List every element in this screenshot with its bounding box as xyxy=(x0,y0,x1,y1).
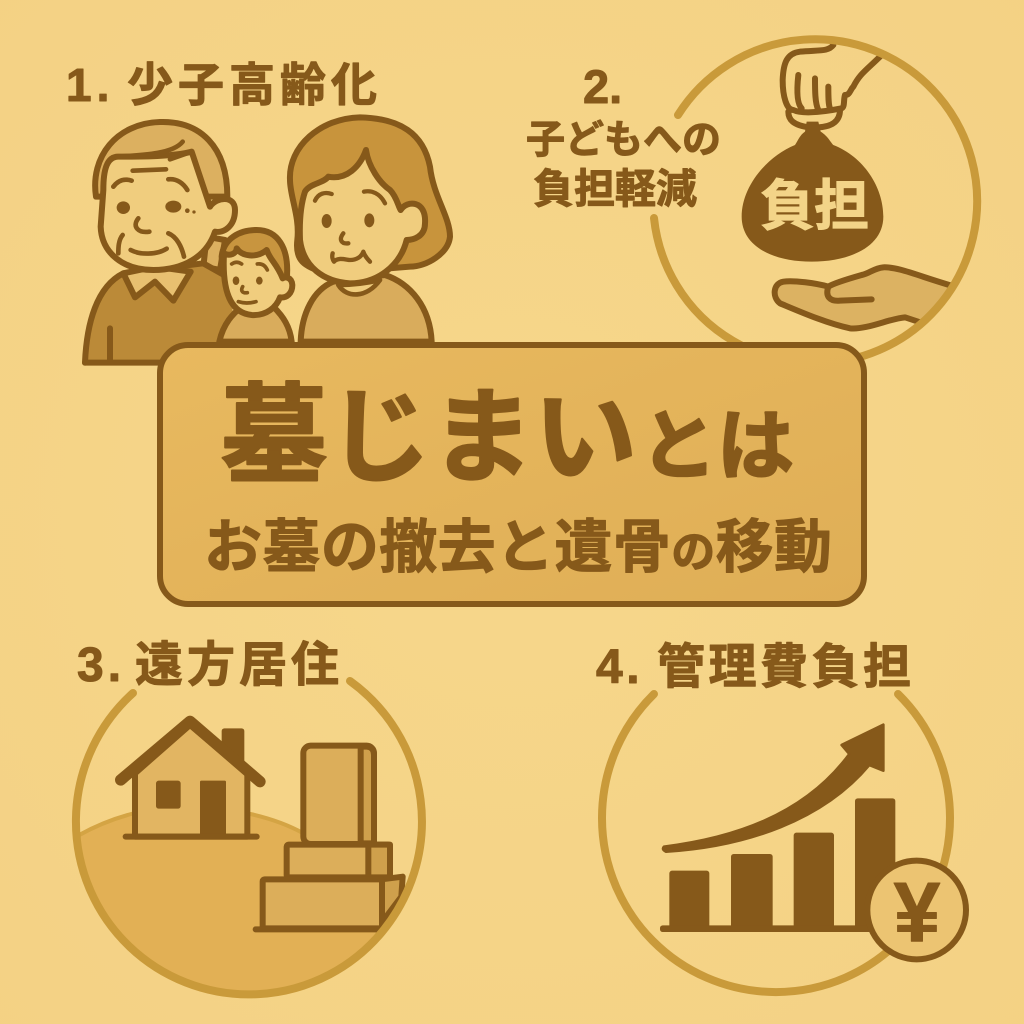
heading number: 2: 2. xyxy=(583,60,622,113)
heading: burden reduction: 子どもへの xyxy=(526,119,721,162)
heading: 4: 4. xyxy=(596,641,643,694)
subtitle: お墓の撤去と遺骨の移動 xyxy=(204,515,832,580)
panel: 2 reducing burden on children xyxy=(526,45,967,328)
ring: circle 3 xyxy=(76,681,422,994)
old man xyxy=(85,122,237,363)
title box xyxy=(160,345,864,604)
upper hand xyxy=(783,45,882,127)
yen coin xyxy=(867,861,966,959)
house xyxy=(121,721,260,837)
child xyxy=(219,230,292,342)
illustration: hand passing burden bag xyxy=(742,45,967,328)
illustration: rising bar chart with yen coin xyxy=(660,725,966,959)
heading: 3: 遠方居住 xyxy=(135,639,343,692)
illustration: three people xyxy=(85,117,450,363)
ring: circle 2 xyxy=(654,39,977,363)
panel: 4 management fee burden xyxy=(596,641,966,992)
illustration: house and grave xyxy=(73,721,403,997)
heading: 3: 3. xyxy=(77,639,125,692)
rising arrow xyxy=(663,725,883,852)
burden bag xyxy=(742,122,883,262)
heading: 1: 少子高齢化 xyxy=(127,59,382,111)
yen sign: ¥ xyxy=(894,865,941,959)
ground hill xyxy=(80,812,376,990)
bars xyxy=(660,798,895,932)
heading: 1: 1. xyxy=(66,59,114,111)
heading: burden reduction line 2: 負担軽減 xyxy=(533,166,697,212)
panel: 1 aging population xyxy=(66,59,450,363)
gravestone xyxy=(256,746,403,929)
woman xyxy=(290,117,450,342)
title: 墓じまいとは xyxy=(220,375,794,496)
lower hand xyxy=(775,267,967,328)
ring: circle 4 xyxy=(602,694,950,992)
panel: 3 living far away xyxy=(73,639,422,997)
bag label: 負担 xyxy=(760,175,868,237)
panel: central title xyxy=(160,345,864,604)
heading: 4: 管理費負担 xyxy=(657,641,915,694)
